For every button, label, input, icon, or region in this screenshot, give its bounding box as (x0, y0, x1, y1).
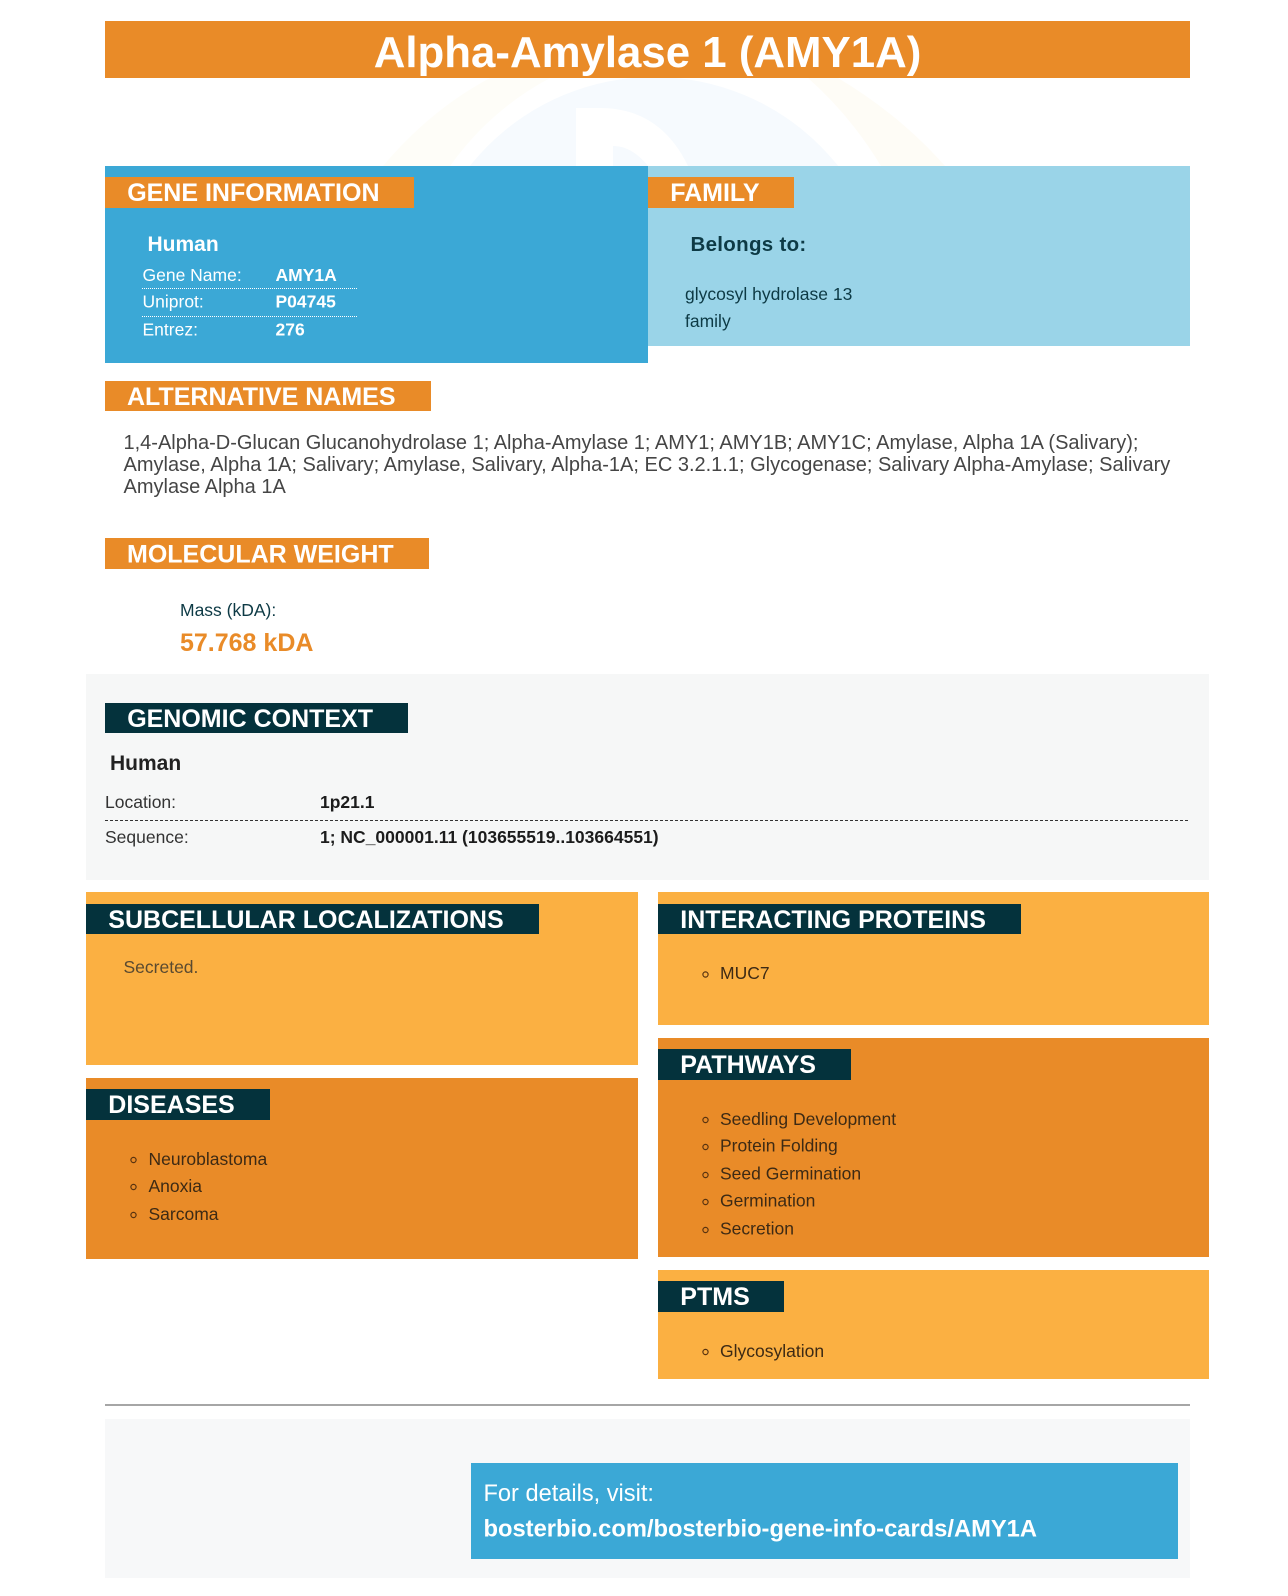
heading: diseases (86, 1089, 270, 1120)
interacting proteins list: MUC7 (720, 963, 770, 983)
heading: ptms (658, 1281, 784, 1312)
genomic table: 1; NC_000001.11 (103655519..103664551) (320, 827, 659, 847)
callout: details link: For details, visit: (484, 1481, 654, 1507)
watermark logo (470, 78, 944, 166)
genomic table: Location: (105, 792, 176, 812)
subcellular text: Secreted. (124, 957, 198, 977)
genomic table: 1p21.1 (320, 792, 375, 812)
heading: family (648, 177, 794, 208)
heading: alternative names: ALTERNATIVE NAMES (127, 383, 396, 411)
heading: molecular weight: MOLECULAR WEIGHT (127, 540, 394, 568)
title banner (105, 21, 1190, 78)
panel: footer (105, 1419, 1190, 1578)
molecular weight value (180, 600, 313, 657)
genomic table: Sequence: (105, 827, 189, 847)
family text: Belongs to: (690, 233, 807, 256)
heading: interacting proteins: INTERACTING PROTEINS (680, 906, 986, 934)
genomic table (105, 752, 1190, 847)
heading: pathways (658, 1049, 851, 1080)
alternative names text: 1,4-Alpha-D-Glucan Glucanohydrolase 1; Alpha-Amylase 1; AMY1; AMY1B; AMY1C; Amylase, Alpha 1A (Salivary); (124, 432, 1138, 454)
family text (685, 233, 852, 331)
gene table (142, 233, 357, 340)
family text: glycosyl hydrolase 13 (685, 284, 852, 304)
genomic table: Human (110, 752, 181, 775)
gene table: 276 (276, 320, 305, 340)
pathways list (703, 1109, 896, 1238)
panel: interacting proteins (658, 892, 1209, 1025)
heading: subcellular localizations: SUBCELLULAR LOCALIZATIONS (108, 906, 504, 934)
diseases list: Sarcoma (148, 1204, 219, 1224)
molecular weight value: Mass (kDA): (180, 600, 276, 620)
pathways list: Protein Folding (720, 1136, 838, 1156)
gene table: AMY1A (276, 265, 337, 285)
alternative names text: Amylase Alpha 1A (124, 476, 286, 498)
gene table: Uniprot: (142, 292, 204, 312)
heading: family: FAMILY (670, 179, 760, 207)
panel: gene information (105, 166, 648, 363)
gene table: P04745 (276, 292, 336, 312)
pathways list: Seedling Development (720, 1109, 896, 1129)
diseases list (131, 1149, 267, 1224)
callout: details link: bosterbio.com/bosterbio-gene-info-cards/AMY1A (484, 1516, 1037, 1542)
alternative names text (124, 432, 1170, 498)
gene table: Human (148, 233, 219, 256)
panel: ptms (658, 1270, 1209, 1379)
pathways list: Germination (720, 1190, 815, 1210)
alternative names text: Amylase, Alpha 1A; Salivary; Amylase, Salivary, Alpha-1A; EC 3.2.1.1; Glycogenase; Salivary Alpha-Amylase; Salivary (124, 454, 1170, 476)
diseases list: Anoxia (148, 1176, 202, 1196)
gene table: Entrez: (142, 320, 198, 340)
ptms list: Glycosylation (720, 1341, 824, 1361)
panel: pathways (658, 1038, 1209, 1257)
panel: subcellular localizations (86, 892, 638, 1065)
callout: details link (471, 1463, 1178, 1559)
diseases list: Neuroblastoma (148, 1149, 267, 1169)
pathways list: Seed Germination (720, 1164, 861, 1184)
molecular weight value: 57.768 kDA (180, 629, 313, 657)
heading: diseases: DISEASES (108, 1091, 235, 1119)
heading: genomic context: GENOMIC CONTEXT (127, 705, 373, 733)
panel: family (648, 166, 1190, 346)
heading: pathways: PATHWAYS (680, 1051, 816, 1079)
panel: genomic context (86, 674, 1209, 880)
heading: ptms: PTMS (680, 1283, 750, 1311)
title banner: Alpha-Amylase 1 (AMY1A) (374, 28, 921, 77)
pathways list: Secretion (720, 1218, 794, 1238)
heading: gene information: GENE INFORMATION (127, 179, 380, 207)
panel: diseases (86, 1078, 638, 1259)
gene table: Gene Name: (142, 265, 242, 285)
family text: family (685, 311, 731, 331)
